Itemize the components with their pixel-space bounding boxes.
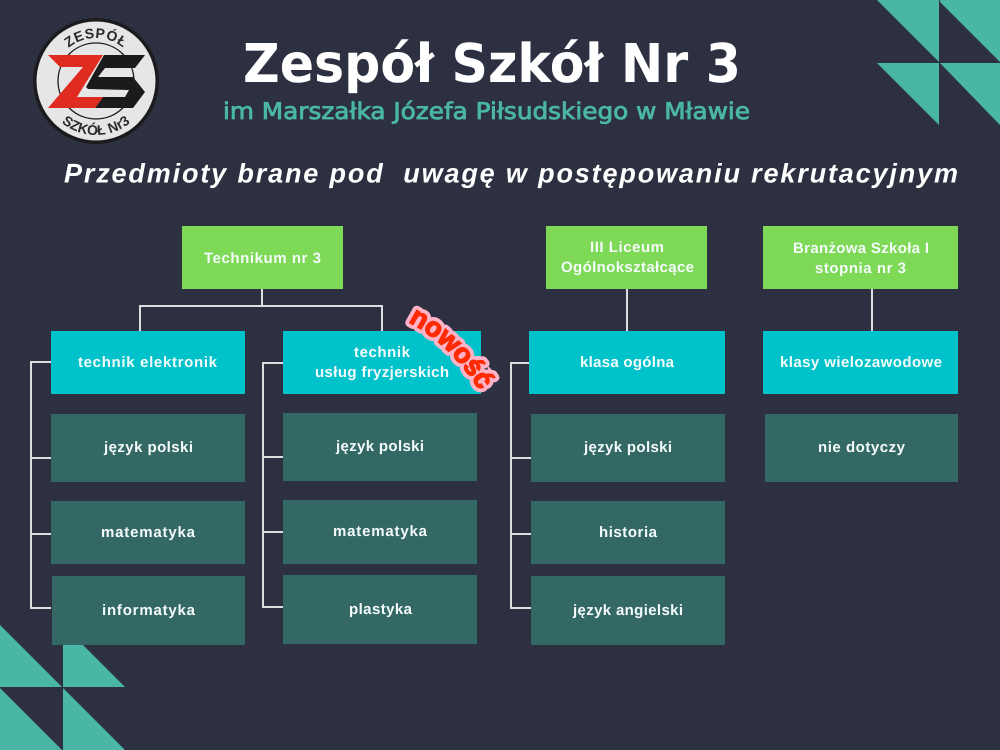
column: klasa ogólna: język angielski xyxy=(572,602,683,619)
column: klasa ogólna xyxy=(529,331,725,645)
column: klasy wielozawodowe: klasy wielozawodowe xyxy=(780,354,942,371)
column: technik usług fryzjerskich xyxy=(283,331,481,644)
column: technik elektronik: język polski xyxy=(103,439,193,456)
column: technik usług fryzjerskich: plastyka xyxy=(349,601,413,618)
school box: III Liceum: III Liceum xyxy=(590,239,664,256)
connector lines xyxy=(31,289,872,608)
badge: nowość: nowość xyxy=(408,309,496,388)
column: technik usług fryzjerskich: matematyka xyxy=(333,523,428,540)
school box: Technikum nr 3: Technikum nr 3 xyxy=(204,250,321,267)
column: klasa ogólna: historia xyxy=(599,524,658,541)
title: Zespół Szkół Nr 3 xyxy=(243,32,741,95)
decoration: triangles bottom left xyxy=(0,625,125,750)
column: technik usług fryzjerskich: język polski xyxy=(335,438,424,455)
logo: Zespół Szkół Nr 3: SZKÓŁ Nr3 xyxy=(62,116,130,135)
column: technik usług fryzjerskich: technik xyxy=(354,344,411,361)
school box: Technikum nr 3 xyxy=(182,226,343,289)
column: klasy wielozawodowe xyxy=(763,331,958,482)
school box: Branżowa Szkoła: stopnia nr 3 xyxy=(815,260,906,277)
school box: Branżowa Szkoła: Branżowa Szkoła I xyxy=(793,240,929,257)
school box: III Liceum xyxy=(546,226,707,289)
decoration: triangles top right xyxy=(877,0,1000,125)
badge: nowość: nowość xyxy=(405,306,500,392)
subtitle: im Marszałka Józefa Piłsudskiego w Mławie xyxy=(223,99,750,125)
column: technik elektronik xyxy=(51,331,245,645)
logo: Zespół Szkół Nr 3: ZESPÓŁ xyxy=(64,28,124,48)
column: klasy wielozawodowe: nie dotyczy xyxy=(818,439,906,456)
column: klasa ogólna: klasa ogólna xyxy=(580,354,675,371)
column: technik usług fryzjerskich: usług fryzjerskich xyxy=(315,364,449,381)
school box: Branżowa Szkoła xyxy=(763,226,958,289)
heading: Przedmioty brane pod uwagę w postępowaniu rekrutacyjnym xyxy=(64,158,958,188)
column: klasa ogólna: język polski xyxy=(583,439,672,456)
column: technik elektronik: matematyka xyxy=(101,524,196,541)
school box: III Liceum: Ogólnokształcące xyxy=(561,259,694,276)
logo: Zespół Szkół Nr 3 xyxy=(33,18,159,144)
column: technik elektronik: informatyka xyxy=(102,602,196,619)
column: technik elektronik: technik elektronik xyxy=(78,354,218,371)
